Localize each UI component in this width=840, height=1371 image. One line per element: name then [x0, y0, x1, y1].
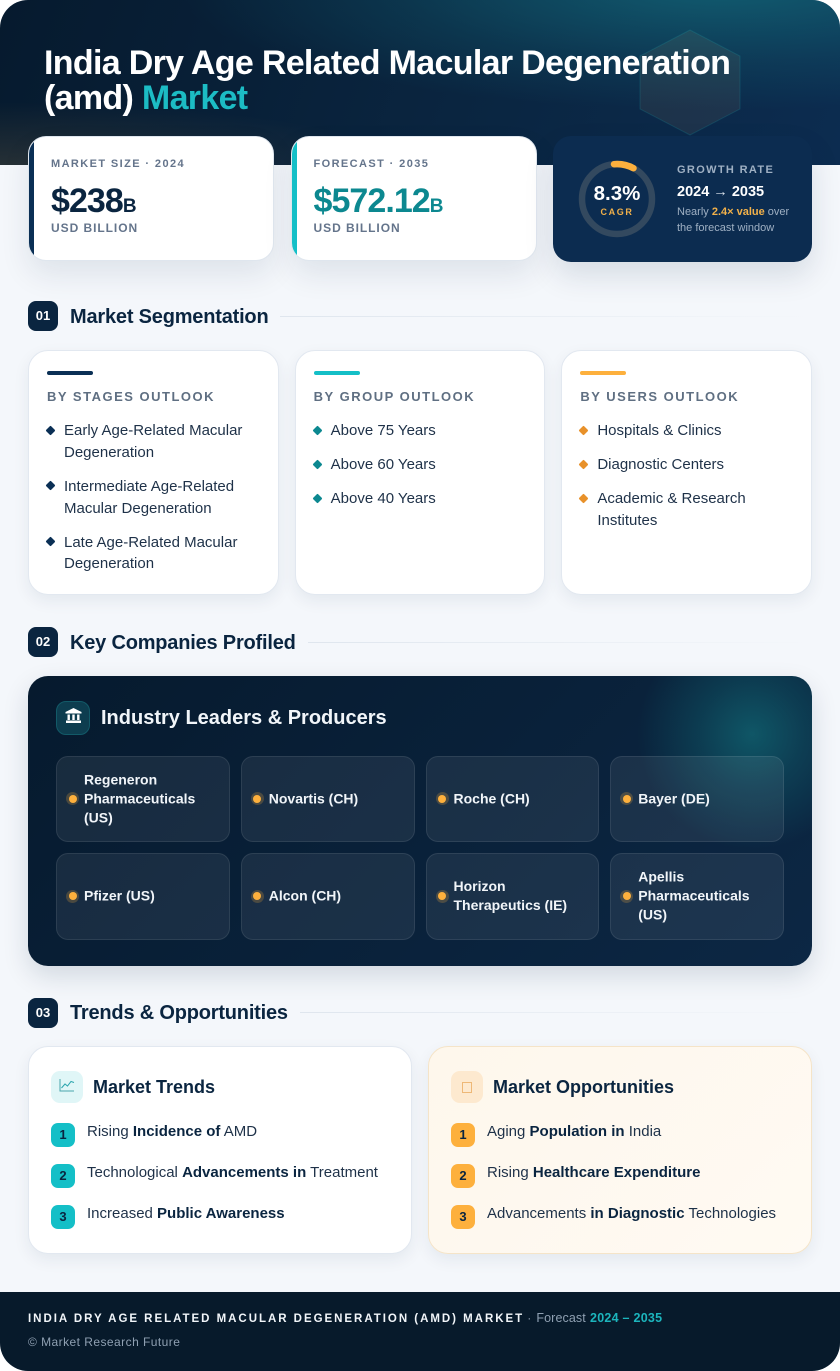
company: Bayer [610, 756, 784, 842]
header banner [0, 0, 840, 165]
company: Regeneron [56, 756, 230, 842]
decorative hexagon [640, 30, 740, 136]
CAGR ring chart [578, 160, 656, 238]
trend number 2 [51, 1164, 75, 1188]
users item 3 [597, 490, 746, 529]
trend number 1 [51, 1123, 75, 1147]
icon: opportunity placeholder [451, 1071, 483, 1103]
stat card: market size: USD BILLION [51, 221, 138, 235]
panel: by group outlook [295, 350, 545, 595]
trend item 1: Rising Incidence of AMD [87, 1123, 257, 1140]
opportunity number 2: 2 [459, 1168, 467, 1183]
trend item 3: Increased Public Awareness [87, 1205, 285, 1222]
company: Apellis: (US) [638, 906, 667, 922]
section badge 03: 03 [36, 1005, 50, 1020]
stages item 2 [64, 478, 234, 517]
group item 3: Above 40 Years [331, 490, 436, 507]
stages item 2: Macular Degeneration [64, 500, 212, 517]
company: Alcon: Alcon (CH) [269, 888, 341, 904]
stages item 1: Degeneration [64, 444, 154, 461]
opportunity item 1: Aging Population in India [487, 1123, 661, 1140]
users item 3: Institutes [597, 512, 657, 529]
stat card: market size: MARKET SIZE · 2024 [51, 158, 185, 170]
panel: industry leaders [28, 676, 812, 966]
stages item 1: Early Age-Related Macular [64, 422, 242, 439]
company: Regeneron: Regeneron [84, 771, 157, 787]
company: Pfizer: Pfizer (US) [84, 888, 155, 904]
company: Apellis [610, 853, 784, 940]
stages item 3: Late Age-Related Macular [64, 534, 237, 551]
panel: market trends [28, 1046, 412, 1254]
CAGR value: 8.3% [594, 182, 640, 205]
panel: by stages outlook [28, 350, 279, 595]
group item 1: Above 75 Years [331, 422, 436, 439]
stages heading: BY STAGES OUTLOOK [47, 389, 215, 404]
stat card: forecast: FORECAST · 2035 [314, 158, 429, 170]
trend item 2: Technological Advancements in Treatment [87, 1164, 378, 1181]
group item 2: Above 60 Years [331, 456, 436, 473]
company: Horizon: Horizon [454, 878, 506, 894]
users heading: BY USERS OUTLOOK [580, 389, 739, 404]
title: India Dry Age Related Macular Degeneration [44, 44, 730, 82]
opportunity number 3: 3 [459, 1209, 467, 1224]
title [44, 44, 730, 116]
company: Roche: Roche (CH) [454, 790, 530, 806]
stat card: market size: $238B [51, 182, 137, 220]
section badge 03 [28, 998, 58, 1028]
growth note: the forecast window [677, 222, 774, 234]
section heading: key companies: Key Companies Profiled [70, 632, 296, 654]
panel heading: Industry Leaders & Producers [101, 707, 387, 729]
stages item 1 [64, 422, 242, 461]
trend number 2: 2 [59, 1168, 67, 1183]
opportunity number 2 [451, 1164, 475, 1188]
stat card: growth rate [553, 136, 812, 262]
section heading: trends: Trends & Opportunities [70, 1002, 288, 1024]
trend number 3: 3 [59, 1209, 67, 1224]
company: Regeneron: Pharmaceuticals [84, 790, 195, 806]
opportunity number 1: 1 [459, 1127, 467, 1142]
company: Novartis [241, 756, 414, 842]
opportunity number 3 [451, 1205, 475, 1229]
company: Apellis: Pharmaceuticals [638, 888, 750, 904]
users item 2: Diagnostic Centers [597, 456, 724, 473]
footer copyright: © Market Research Future [28, 1335, 180, 1349]
growth years: 2024 → 2035 [677, 184, 764, 200]
panel: market opportunities [428, 1046, 812, 1254]
panel: by users outlook [561, 350, 812, 595]
company: Pfizer [56, 853, 230, 940]
opportunities heading: Market Opportunities [493, 1077, 674, 1097]
section badge 01: 01 [36, 308, 50, 323]
opportunity item 2: Rising Healthcare Expenditure [487, 1164, 700, 1181]
footer title line: INDIA DRY AGE RELATED MACULAR DEGENERATION (AMD) MARKET · Forecast 2024 – 2035 [28, 1311, 662, 1325]
group heading: BY GROUP OUTLOOK [314, 389, 475, 404]
stat card: forecast: USD BILLION [314, 221, 401, 235]
company: Alcon [241, 853, 414, 940]
company: Novartis: Novartis (CH) [269, 790, 358, 806]
title: (amd) Market [44, 78, 247, 116]
icon: institution [56, 701, 90, 735]
section badge 01 [28, 301, 58, 331]
company: Bayer: Bayer (DE) [638, 790, 710, 806]
CAGR label: CAGR [601, 207, 633, 217]
stages item 3 [64, 534, 238, 572]
company: Apellis: Apellis [638, 868, 684, 884]
section badge 02 [28, 627, 58, 657]
stages item 2: Intermediate Age-Related [64, 478, 234, 495]
company: Horizon: Therapeutics (IE) [454, 897, 567, 913]
growth note [677, 206, 789, 234]
company: Horizon [426, 853, 599, 940]
company: Regeneron: (US) [84, 809, 113, 825]
stat card: forecast [291, 136, 537, 261]
stat card: forecast: $572.12B [314, 182, 444, 220]
opportunity number 1 [451, 1123, 475, 1147]
opportunity item 3: Advancements in Diagnostic Technologies [487, 1205, 776, 1222]
footer [0, 1292, 840, 1371]
users item 1: Hospitals & Clinics [597, 422, 722, 439]
trends heading: Market Trends [93, 1077, 215, 1097]
growth note: Nearly 2.4× value over [677, 206, 789, 218]
trend number 3 [51, 1205, 75, 1229]
users item 3: Academic & Research [597, 490, 746, 507]
stages item 3: Degeneration [64, 555, 154, 572]
company: Roche [426, 756, 599, 842]
section heading: market segmentation: Market Segmentation [70, 306, 268, 328]
icon: trend chart [51, 1071, 83, 1103]
stat card: market size [28, 136, 274, 261]
section badge 02: 02 [36, 634, 50, 649]
trend number 1: 1 [59, 1127, 67, 1142]
growth rate label: GROWTH RATE [677, 164, 774, 176]
